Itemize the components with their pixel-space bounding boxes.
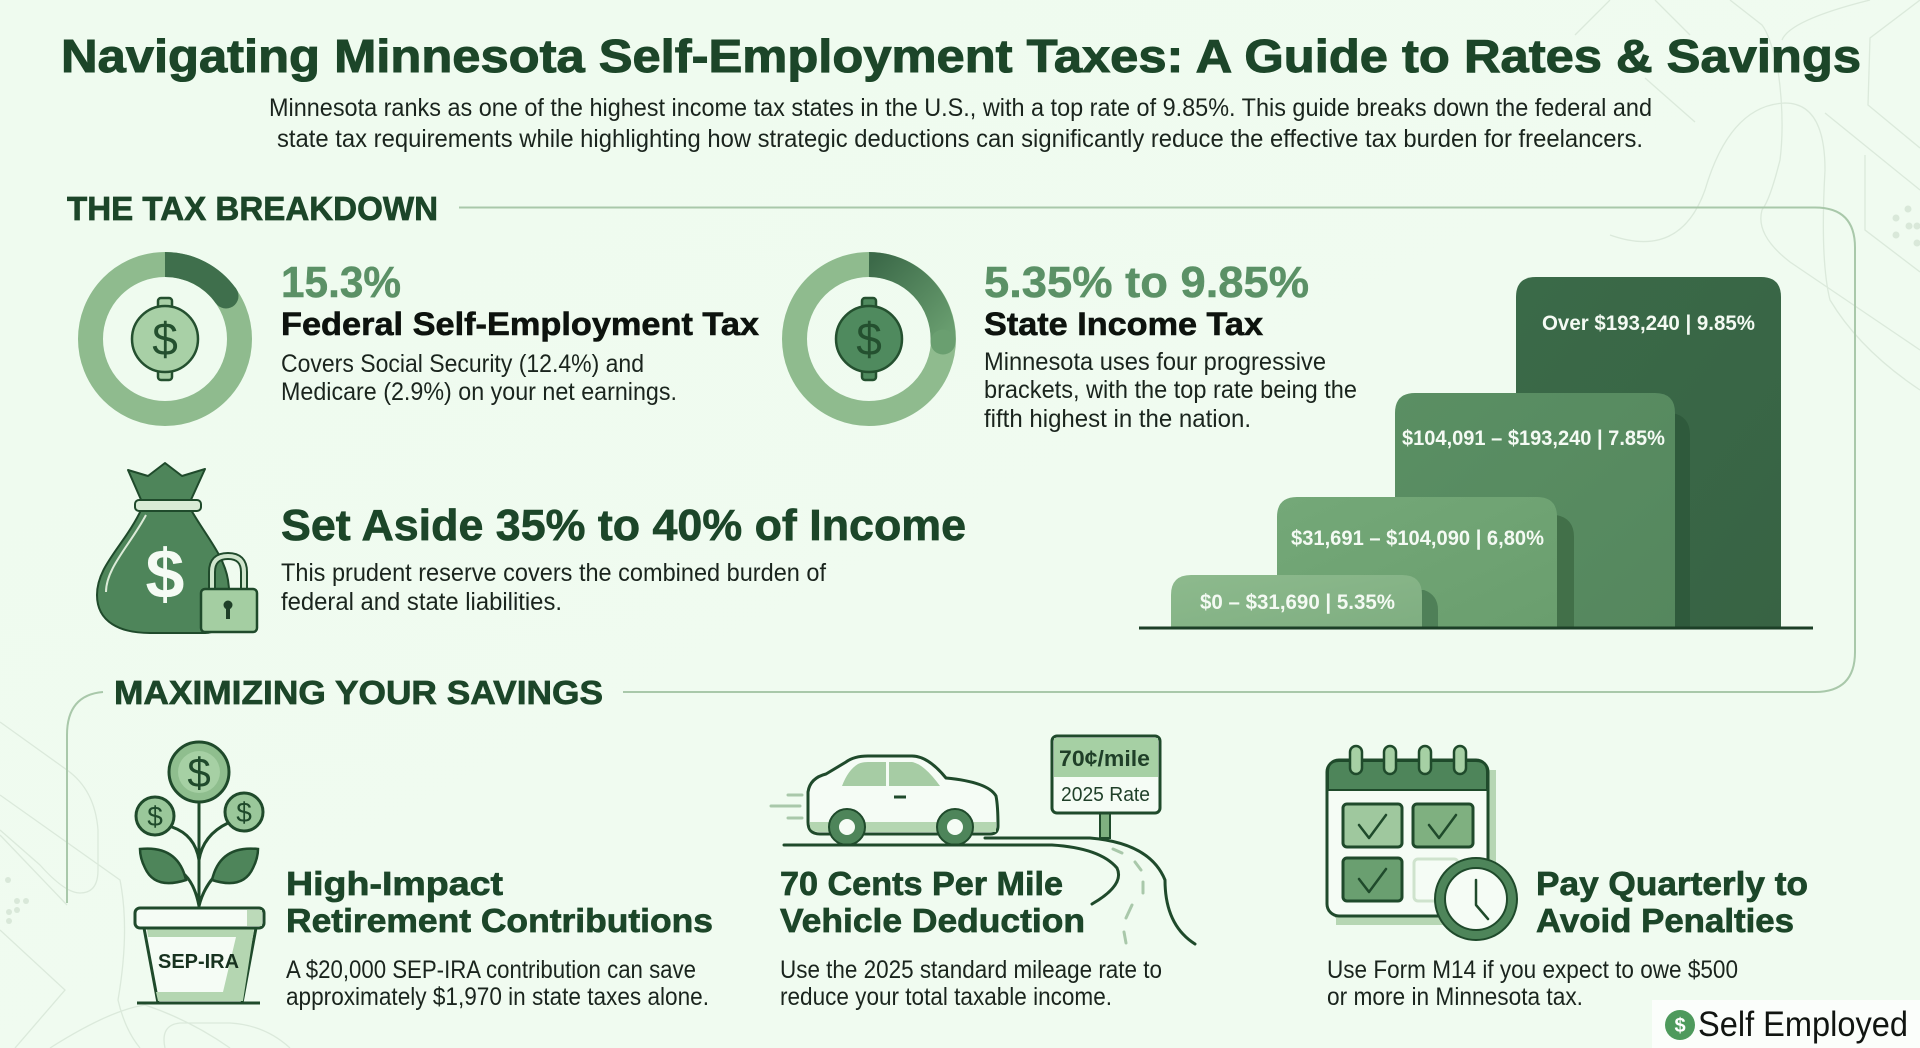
heading: 70 cents per mile vehicle deduction	[780, 865, 1085, 939]
panel: retirement contributions	[135, 742, 713, 1011]
heading: pay quarterly to avoid penalties	[1536, 865, 1808, 939]
icon: money bag with padlock: $	[146, 535, 184, 613]
heading: federal self-employment tax: Federal Self-Employment Tax	[281, 306, 759, 342]
text: reserve description: This prudent reserve covers the combined burden of	[281, 559, 826, 587]
section frame connector	[459, 208, 1855, 692]
heading: pay quarterly to avoid penalties: Avoid Penalties	[1536, 902, 1794, 939]
icon: car on road with mileage sign: 2025 Rate	[1061, 784, 1150, 806]
heading: maximizing your savings: MAXIMIZING YOUR SAVINGS	[114, 674, 603, 711]
icon: money bag with padlock	[97, 463, 257, 633]
text: federal description: Medicare (2.9%) on your net earnings.	[281, 378, 677, 406]
heading: 70 cents per mile vehicle deduction: Vehicle Deduction	[780, 902, 1085, 939]
icon: plant in SEP-IRA pot: $	[236, 797, 252, 828]
bar: $104,091 to $193,240	[1395, 393, 1690, 627]
bar: $31,691 to $104,090: $31,691 – $104,090 | 6,80%	[1291, 527, 1544, 550]
icon: car on road with mileage sign: 70¢/mile	[1059, 746, 1150, 771]
logo: self employed badge: Self Employed	[1698, 1005, 1908, 1044]
panel: quarterly payments	[1327, 746, 1808, 1011]
text: reserve description: federal and state liabilities.	[281, 588, 562, 616]
logo: self employed badge	[1652, 1000, 1920, 1048]
text: state description	[984, 348, 1357, 433]
intro text: Minnesota ranks as one of the highest income tax states in the U.S., with a top rate of 9.85%. This guide breaks down the federal and	[269, 94, 1652, 122]
text: state description: brackets, with the top rate being the	[984, 376, 1357, 404]
bar: $31,691 to $104,090	[1277, 497, 1574, 627]
intro text	[269, 94, 1652, 153]
panel: set aside	[97, 463, 966, 633]
heading: set aside 35% to 40%: Set Aside 35% to 40% of Income	[281, 501, 966, 550]
text: federal description	[281, 350, 677, 406]
bar: $0 to $31,690	[1171, 575, 1438, 627]
text: retirement description: approximately $1,970 in state taxes alone.	[286, 983, 709, 1011]
icon: plant in SEP-IRA pot: SEP-IRA	[158, 951, 239, 973]
text: reserve description	[281, 559, 826, 616]
icon: plant in SEP-IRA pot: $	[147, 801, 163, 832]
text: vehicle description	[780, 956, 1162, 1011]
text: federal description: Covers Social Security (12.4%) and	[281, 350, 644, 378]
text: state description: Minnesota uses four progressive	[984, 348, 1326, 376]
text: form M14 description	[1327, 956, 1738, 1011]
text: state description: fifth highest in the nation.	[984, 405, 1251, 433]
stat: 5.35% to 9.85%: 5.35% to 9.85%	[984, 258, 1309, 307]
heading: pay quarterly to avoid penalties: Pay Quarterly to	[1536, 865, 1808, 902]
icon: car on road with mileage sign	[771, 736, 1195, 944]
text: vehicle description: reduce your total taxable income.	[780, 983, 1112, 1011]
icon: federal donut with coin: $	[152, 313, 178, 365]
icon: plant in SEP-IRA pot	[135, 742, 264, 1003]
text: form M14 description: Use Form M14 if you expect to owe $500	[1327, 956, 1738, 984]
savings frame connector	[67, 692, 103, 903]
icon: state donut with coin	[794, 264, 956, 414]
chart baseline	[1139, 626, 1813, 630]
title: Navigating Minnesota Self-Employment Taxes: A Guide to Rates & Savings	[61, 30, 1861, 82]
logo: self employed badge: $	[1674, 1015, 1686, 1037]
stat: 15.3%: 15.3%	[281, 258, 401, 307]
icon: calendar with clock	[1327, 746, 1517, 940]
icon: state donut with coin: $	[856, 313, 882, 365]
bar: $0 to $31,690: $0 – $31,690 | 5.35%	[1200, 591, 1395, 614]
heading: high-impact retirement contributions	[286, 865, 713, 939]
icon: federal donut with coin	[90, 264, 240, 414]
panel: federal self-employment tax	[90, 258, 759, 414]
panel: vehicle deduction	[771, 736, 1195, 1011]
heading: 70 cents per mile vehicle deduction: 70 Cents Per Mile	[780, 865, 1063, 902]
icon: plant in SEP-IRA pot: $	[187, 749, 211, 796]
text: retirement description: A $20,000 SEP-IRA contribution can save	[286, 956, 696, 984]
bar: $104,091 to $193,240: $104,091 – $193,240 | 7.85%	[1402, 427, 1665, 450]
text: retirement description	[286, 956, 709, 1011]
panel: state income tax	[794, 258, 1357, 433]
heading: the tax breakdown: THE TAX BREAKDOWN	[67, 190, 438, 227]
chart: tax brackets staircase	[1139, 277, 1813, 628]
intro text: state tax requirements while highlighting how strategic deductions can significantly reduce the effective tax burden for freelancers.	[277, 125, 1643, 153]
heading: high-impact retirement contributions: High-Impact	[286, 865, 503, 902]
bar: over $193,240: Over $193,240 | 9.85%	[1542, 312, 1755, 335]
text: form M14 description: or more in Minnesota tax.	[1327, 983, 1583, 1011]
text: vehicle description: Use the 2025 standard mileage rate to	[780, 956, 1162, 984]
bar: over $193,240	[1516, 277, 1781, 627]
heading: state income tax: State Income Tax	[984, 306, 1263, 342]
heading: high-impact retirement contributions: Retirement Contributions	[286, 902, 713, 939]
